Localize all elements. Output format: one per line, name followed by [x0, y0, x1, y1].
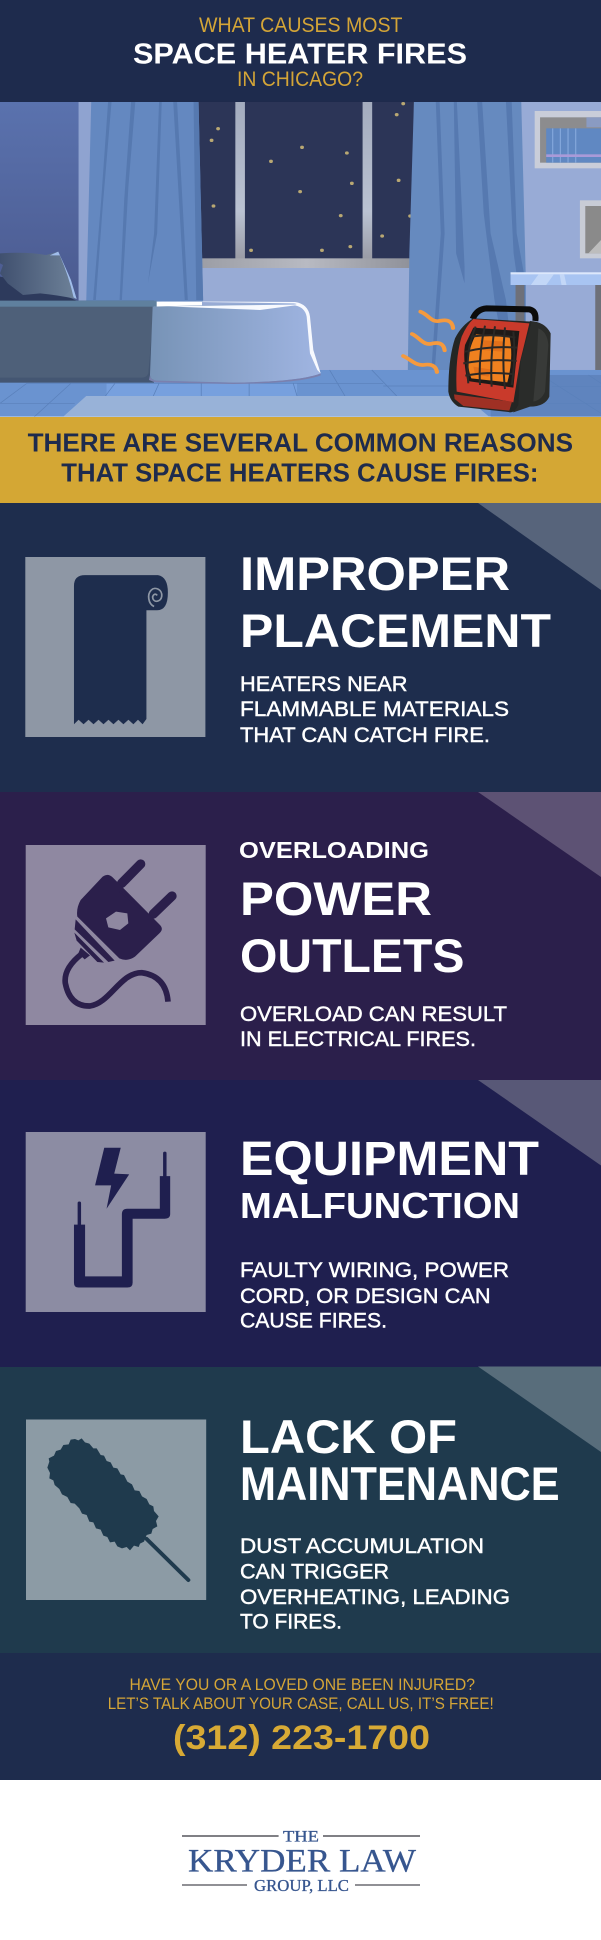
illustration: bedroom scene with space heater [0, 102, 601, 417]
heading: EQUIPMENT [240, 1133, 539, 1186]
bed with blanket [0, 301, 321, 384]
icon tile: feather duster [26, 1420, 206, 1600]
law firm logo: GROUP, LLC [254, 1876, 349, 1895]
description: THAT CAN CATCH FIRE. [240, 723, 490, 747]
front housing [448, 318, 532, 412]
heading: MAINTENANCE [240, 1457, 560, 1510]
handle [473, 308, 536, 321]
description: DUST ACCUMULATION [240, 1534, 484, 1558]
call to action text: HAVE YOU OR A LOVED ONE BEEN INJURED? [130, 1676, 475, 1694]
description [240, 1002, 507, 1051]
description: FAULTY WIRING, POWER [240, 1258, 509, 1282]
subheading: OVERLOADING [239, 837, 429, 863]
wall shelf with books [535, 111, 601, 168]
space heater [448, 308, 551, 412]
heading: POWER [240, 872, 432, 925]
gold banner [0, 417, 601, 503]
panel: overloading power outlets [0, 792, 601, 1080]
title line: space heater fires: SPACE HEATER FIRES [133, 38, 467, 70]
wall picture frame [580, 200, 601, 258]
description: CORD, OR DESIGN CAN [240, 1284, 491, 1308]
description: HEATERS NEAR [240, 672, 408, 696]
blanket [150, 303, 321, 383]
title line: what causes most: WHAT CAUSES MOST [199, 14, 403, 37]
pillow [0, 252, 79, 302]
phone number: (312) 223-1700 [173, 1719, 430, 1757]
panel: equipment malfunction [0, 1080, 601, 1367]
left wall [0, 102, 79, 302]
heading: LACK OF [240, 1410, 457, 1463]
left curtain [86, 102, 203, 302]
description: OVERLOAD CAN RESULT [240, 1002, 507, 1026]
title line: in chicago: IN CHICAGO? [237, 68, 363, 91]
heat waves [403, 312, 453, 372]
panel: lack of maintenance [0, 1366, 601, 1654]
description [240, 672, 509, 747]
call to action band [0, 1653, 601, 1780]
heading: OUTLETS [240, 929, 464, 982]
description: TO FIRES. [240, 1610, 342, 1634]
description [240, 1534, 510, 1634]
description: IN ELECTRICAL FIRES. [240, 1027, 476, 1051]
description: FLAMMABLE MATERIALS [240, 697, 509, 721]
description [240, 1258, 509, 1332]
call to action text: LET’S TALK ABOUT YOUR CASE, CALL US, IT’S FREE! [108, 1695, 494, 1713]
back housing [510, 321, 551, 412]
description: CAN TRIGGER [240, 1560, 389, 1584]
desk [511, 272, 601, 374]
law firm logo: KRYDER LAW [188, 1844, 417, 1880]
wall below window and right wall [202, 102, 601, 372]
heading: IMPROPER [240, 547, 510, 600]
glowing element [464, 328, 519, 388]
header band [0, 0, 601, 102]
icon tile: plug [26, 845, 206, 1025]
banner line 2: THAT SPACE HEATERS CAUSE FIRES: [61, 460, 539, 488]
icon tile: paper roll [25, 557, 205, 737]
right curtain [408, 102, 526, 371]
call to action text [108, 1676, 494, 1713]
heading: MALFUNCTION [240, 1185, 520, 1226]
panel: improper placement [0, 503, 601, 792]
floor with tiles [0, 370, 601, 417]
icon tile: damaged wire and spark [26, 1132, 206, 1312]
wire grill [463, 326, 517, 389]
red frame [456, 319, 529, 402]
stars [210, 102, 412, 252]
law firm logo [182, 1829, 420, 1895]
banner line 1: THERE ARE SEVERAL COMMON REASONS [28, 430, 573, 458]
law firm logo: THE [283, 1829, 319, 1846]
description: OVERHEATING, LEADING [240, 1585, 510, 1609]
heading: PLACEMENT [240, 604, 551, 657]
window with night sky [199, 102, 414, 268]
description: CAUSE FIRES. [240, 1308, 387, 1332]
rug [63, 396, 489, 417]
